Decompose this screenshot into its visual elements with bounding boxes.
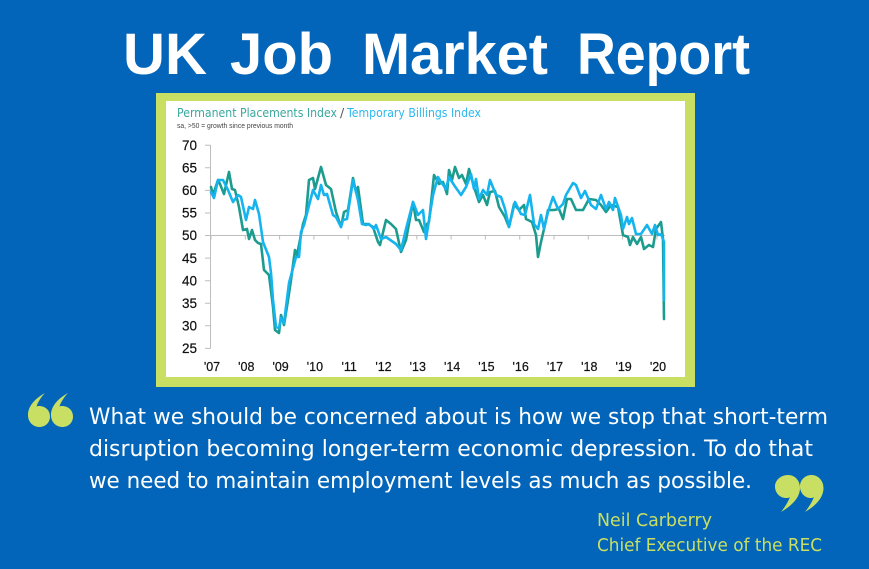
y axis (182, 138, 210, 356)
chart title: Permanent Placements Index (177, 105, 337, 120)
x axis: '19 (615, 360, 632, 374)
quote text: disruption becoming longer-term economic depression. To do that (89, 436, 813, 462)
chart title (177, 105, 481, 120)
attribution (597, 510, 822, 556)
title: Job (230, 22, 333, 87)
icon: closing quotation mark (775, 475, 824, 512)
title: UK (123, 22, 207, 87)
y axis: 60 (182, 183, 197, 198)
attribution: Chief Executive of the REC (597, 535, 822, 556)
x axis: '15 (478, 360, 495, 374)
line: temporary billings index (211, 174, 664, 328)
title: Report (577, 22, 750, 87)
y axis: 70 (182, 138, 197, 153)
y axis: 45 (182, 251, 197, 266)
x axis (204, 236, 666, 374)
title: Market (362, 22, 548, 87)
chart title: / (340, 105, 345, 120)
icon: opening quotation mark (28, 393, 73, 427)
x axis: '16 (513, 360, 529, 374)
y axis: 40 (182, 274, 197, 288)
x axis: '11 (342, 360, 357, 374)
y axis: 35 (182, 296, 197, 311)
y axis: 30 (182, 318, 197, 334)
panel: line chart frame (156, 93, 695, 387)
attribution: Neil Carberry (597, 510, 712, 531)
quote text: What we should be concerned about is how we stop that short-term (89, 404, 828, 430)
x axis: '12 (375, 360, 392, 374)
y axis: 50 (182, 228, 197, 243)
x axis: '17 (547, 360, 563, 374)
title (123, 22, 750, 87)
x axis: '18 (581, 360, 597, 374)
quote text (89, 404, 828, 494)
x axis: '09 (272, 360, 289, 374)
x axis: '08 (238, 360, 254, 374)
x axis: '10 (307, 360, 323, 374)
x axis: '20 (650, 360, 666, 374)
y axis: 25 (182, 341, 197, 356)
chart subtitle: sa, >50 = growth since previous month (177, 123, 293, 130)
chart title: Temporary Billings Index (346, 105, 481, 120)
y axis: 65 (182, 160, 197, 176)
x axis: '14 (444, 360, 460, 374)
x axis: '07 (204, 360, 220, 374)
x axis: '13 (410, 360, 426, 374)
y axis: 55 (182, 206, 197, 220)
quote text: we need to maintain employment levels as much as possible. (89, 468, 752, 494)
line: permanent placements index (211, 167, 664, 333)
